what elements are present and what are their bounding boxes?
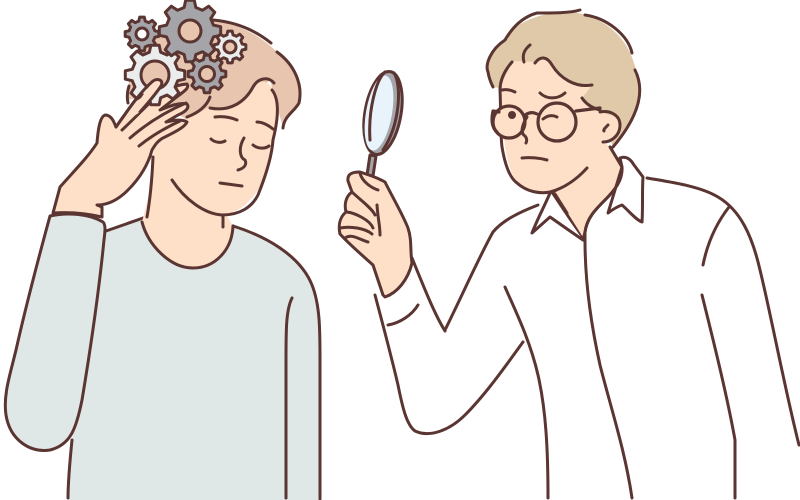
gear: white large bbox=[125, 45, 185, 105]
face lines bbox=[500, 90, 622, 240]
gear: lower right bbox=[188, 55, 226, 93]
face lines bbox=[127, 20, 300, 227]
sleeve bbox=[5, 214, 105, 450]
collar bbox=[532, 157, 643, 240]
sweater body bbox=[68, 217, 320, 500]
glasses bbox=[492, 103, 600, 141]
gear group bbox=[125, 0, 246, 105]
figure: man with gears bbox=[5, 0, 320, 500]
magnifying glass bbox=[358, 69, 408, 176]
neck bbox=[552, 147, 622, 240]
face bbox=[150, 82, 277, 214]
hand bbox=[53, 79, 188, 217]
finger lines bbox=[340, 173, 380, 242]
figure: man with magnifying glass bbox=[339, 10, 800, 500]
collar line bbox=[142, 222, 233, 268]
hand bbox=[339, 172, 412, 297]
fingertip outline bbox=[116, 80, 162, 127]
ear bbox=[600, 112, 620, 142]
shirt bbox=[375, 178, 800, 500]
hair lines bbox=[487, 10, 640, 147]
gear: small right bbox=[214, 31, 246, 63]
eyes, brows, nose, mouth bbox=[502, 90, 565, 160]
face bbox=[500, 59, 621, 192]
gear: top left bbox=[125, 17, 159, 51]
finger lines bbox=[122, 95, 186, 146]
gear: top large bbox=[159, 0, 221, 62]
hair bbox=[128, 20, 299, 128]
fingertip over gear bbox=[125, 80, 162, 122]
hair bbox=[488, 12, 639, 147]
neck bbox=[142, 190, 233, 268]
